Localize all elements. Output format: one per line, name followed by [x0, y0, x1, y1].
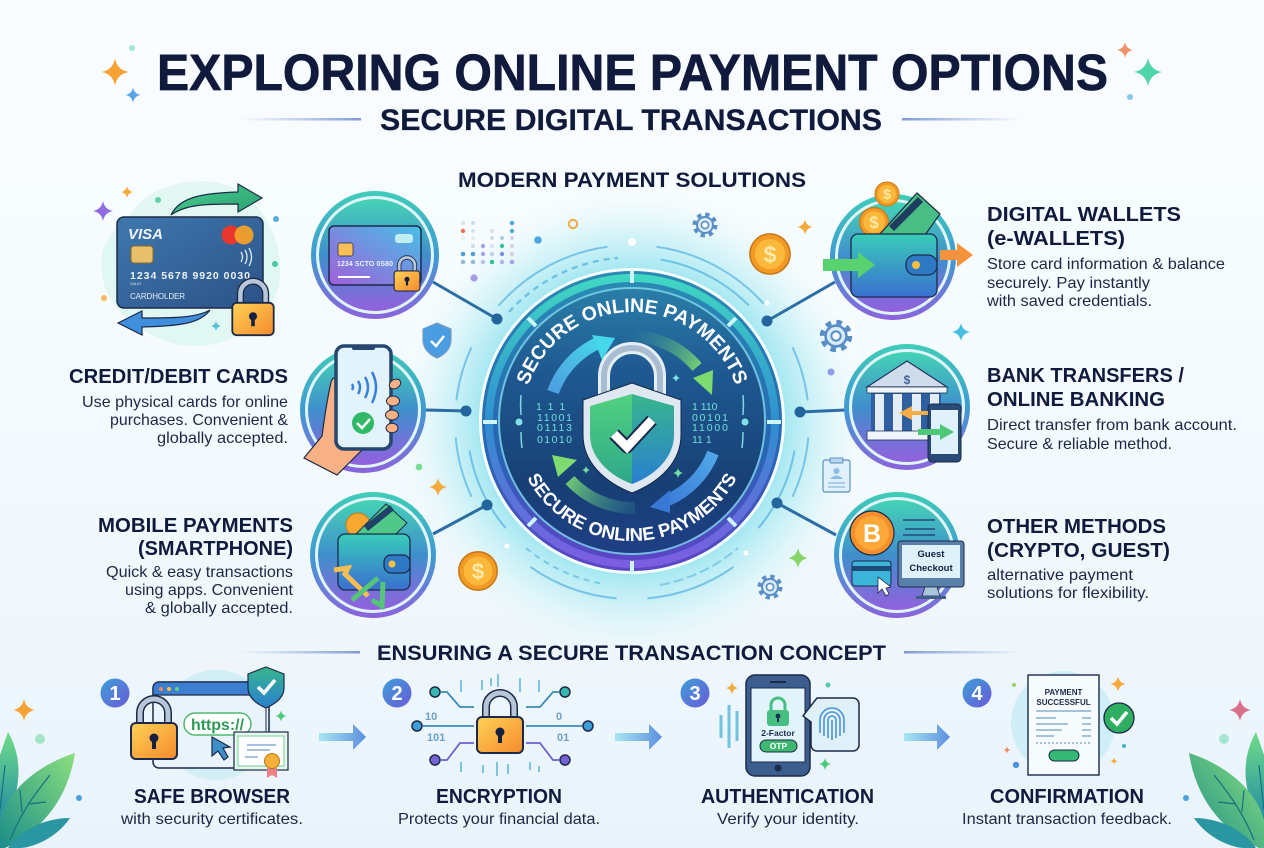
binary digits right — [692, 401, 728, 446]
bottom arrow — [118, 310, 210, 335]
step 1: safe browser: with security certificates. — [120, 811, 303, 828]
binary digits left: 11001 — [537, 412, 572, 424]
badge 2: 2 — [391, 683, 403, 705]
step 3: authentication: Verify your identity. — [717, 811, 859, 828]
medallion: wallet with arrows — [310, 492, 436, 618]
text: digital wallets: DIGITAL WALLETS — [987, 203, 1181, 226]
medallion: crypto and guest checkout — [834, 492, 964, 618]
medallion: card with lock: 1234 SCTO 0S80 — [337, 261, 393, 268]
central secure online payments badge: SECURE ONLINE PAYMENTS — [517, 298, 747, 384]
badge 1: 1 — [109, 683, 121, 705]
medallion: bank transfer — [844, 344, 970, 470]
panel: credit debit card illustration: VISA — [128, 226, 163, 243]
badge 3: 3 — [689, 683, 701, 705]
panel: credit debit card illustration — [93, 181, 280, 346]
badge 2 — [382, 678, 412, 708]
text: digital wallets: securely. Pay instantly — [987, 275, 1150, 292]
step 1: safe browser — [100, 667, 303, 828]
medallion: bank transfer: $ — [904, 373, 911, 387]
medallion: card with lock — [311, 191, 439, 319]
text: digital wallets: (e-WALLETS) — [987, 227, 1125, 250]
arrow: step 3 to 4 — [904, 724, 950, 750]
curved text bottom — [513, 422, 751, 541]
text: credit debit cards: CREDIT/DEBIT CARDS — [69, 365, 288, 388]
top arrow — [171, 184, 262, 215]
text: credit debit cards: globally accepted. — [157, 430, 288, 447]
step 4: confirmation: SUCCESSFUL — [1036, 698, 1091, 707]
clipboard — [823, 458, 850, 492]
arrow: step 2 to 3 — [615, 724, 662, 750]
central secure online payments badge — [479, 268, 785, 574]
medallion: crypto and guest checkout: Guest — [918, 549, 945, 560]
text: mobile payments: MOBILE PAYMENTS — [98, 514, 293, 537]
text: other methods — [987, 515, 1170, 602]
text: bank transfers: Secure & reliable method. — [987, 436, 1172, 453]
binary digits left: 01010 — [537, 434, 572, 446]
step 4: confirmation: Instant transaction feedback. — [962, 811, 1172, 828]
text: mobile payments — [98, 514, 294, 617]
medallion: phone in hand — [300, 346, 426, 475]
text: bank transfers: Direct transfer from bank account. — [987, 417, 1237, 434]
foliage bottom right — [1183, 699, 1264, 848]
binary digits left — [536, 401, 572, 446]
step 4: confirmation — [962, 671, 1172, 828]
section heading: ensuring a secure transaction: ENSURING A SECURE TRANSACTION CONCEPT — [377, 641, 886, 665]
outer orbit rings — [455, 238, 809, 599]
rotating arrows — [553, 336, 713, 508]
arrow: step 1 to 2 — [319, 724, 366, 750]
text: mobile payments: using apps. Convenient — [125, 582, 294, 599]
central shield — [583, 383, 681, 493]
medallion: digital wallet — [823, 182, 973, 320]
medallion: crypto and guest checkout: Checkout — [909, 563, 953, 574]
subtitle: SECURE DIGITAL TRANSACTIONS — [380, 104, 882, 137]
label: SAFE BROWSER — [134, 786, 291, 808]
central secure online payments badge: SECURE ONLINE PAYMENTS — [528, 474, 736, 542]
label: AUTHENTICATION — [701, 786, 874, 808]
binary digits left: 1 1 1 — [536, 401, 565, 413]
step 2: encryption: 0 — [556, 711, 562, 723]
inner arcs and side dots — [516, 395, 748, 448]
small shield — [423, 323, 451, 358]
text: mobile payments: (SMARTPHONE) — [138, 537, 293, 560]
medallion: crypto and guest checkout: B — [863, 520, 881, 548]
step 3: authentication: OTP — [770, 741, 788, 751]
step 2: encryption — [382, 674, 600, 828]
ring ticks — [483, 271, 781, 573]
central lock shackle — [604, 348, 660, 395]
binary digits right: 11000 — [692, 422, 728, 434]
binary digits left: 01113 — [537, 422, 572, 434]
foliage bottom left — [0, 699, 82, 848]
text: digital wallets: with saved credentials. — [986, 293, 1152, 310]
text: other methods: (CRYPTO, GUEST) — [987, 539, 1170, 562]
text: other methods: alternative payment — [987, 567, 1134, 584]
text: credit debit cards: Use physical cards for online — [82, 394, 288, 411]
step 2: encryption: 10 — [425, 711, 437, 723]
text: mobile payments: & globally accepted. — [145, 600, 293, 617]
text: other methods: OTHER METHODS — [987, 515, 1166, 538]
step 2: encryption: Protects your financial data. — [398, 811, 600, 828]
badge 3 — [680, 678, 710, 708]
panel: credit debit card illustration: CARDHOLDER — [130, 292, 185, 301]
decorative icons around the hub — [416, 215, 970, 597]
central glow — [400, 190, 864, 654]
curved text top — [522, 312, 742, 422]
binary digits right: 11 1 — [692, 434, 712, 446]
label: ENCRYPTION — [436, 786, 562, 808]
text: mobile payments: Quick & easy transactions — [106, 564, 293, 581]
connector lines — [426, 282, 845, 535]
text: bank transfers: ONLINE BANKING — [987, 388, 1165, 411]
dot grid — [461, 221, 514, 282]
badge 4 — [962, 678, 992, 708]
section heading: modern payment solutions: MODERN PAYMENT SOLUTIONS — [458, 168, 806, 192]
panel: credit debit card illustration: 1234 5678 9920 0030 — [130, 270, 250, 282]
binary digits right: 00101 — [692, 412, 728, 424]
text: credit debit cards — [69, 365, 288, 447]
step 3: authentication — [680, 675, 874, 828]
text: bank transfers: BANK TRANSFERS / — [987, 364, 1184, 387]
bank card — [117, 217, 263, 308]
step 1: safe browser: https:// — [191, 717, 245, 734]
title decorative sparkles — [102, 42, 1162, 102]
label: CONFIRMATION — [990, 786, 1144, 808]
title: EXPLORING ONLINE PAYMENT OPTIONS — [157, 44, 1108, 101]
step 2: encryption: 101 — [427, 732, 445, 744]
text: other methods: solutions for flexibility. — [987, 585, 1149, 602]
panel: credit debit card illustration: VALID — [130, 281, 141, 286]
text: bank transfers — [987, 364, 1237, 453]
step 3: authentication: 2-Factor — [761, 728, 795, 738]
step 4: confirmation: PAYMENT — [1045, 688, 1082, 697]
badge 4: 4 — [971, 683, 983, 705]
text: credit debit cards: purchases. Convenient & — [110, 412, 288, 429]
step 2: encryption: 01 — [557, 732, 569, 744]
binary digits right: 1 110 — [692, 401, 718, 413]
text: digital wallets — [986, 203, 1225, 310]
badge 1 — [100, 678, 130, 708]
text: digital wallets: Store card information & balance — [987, 256, 1225, 273]
